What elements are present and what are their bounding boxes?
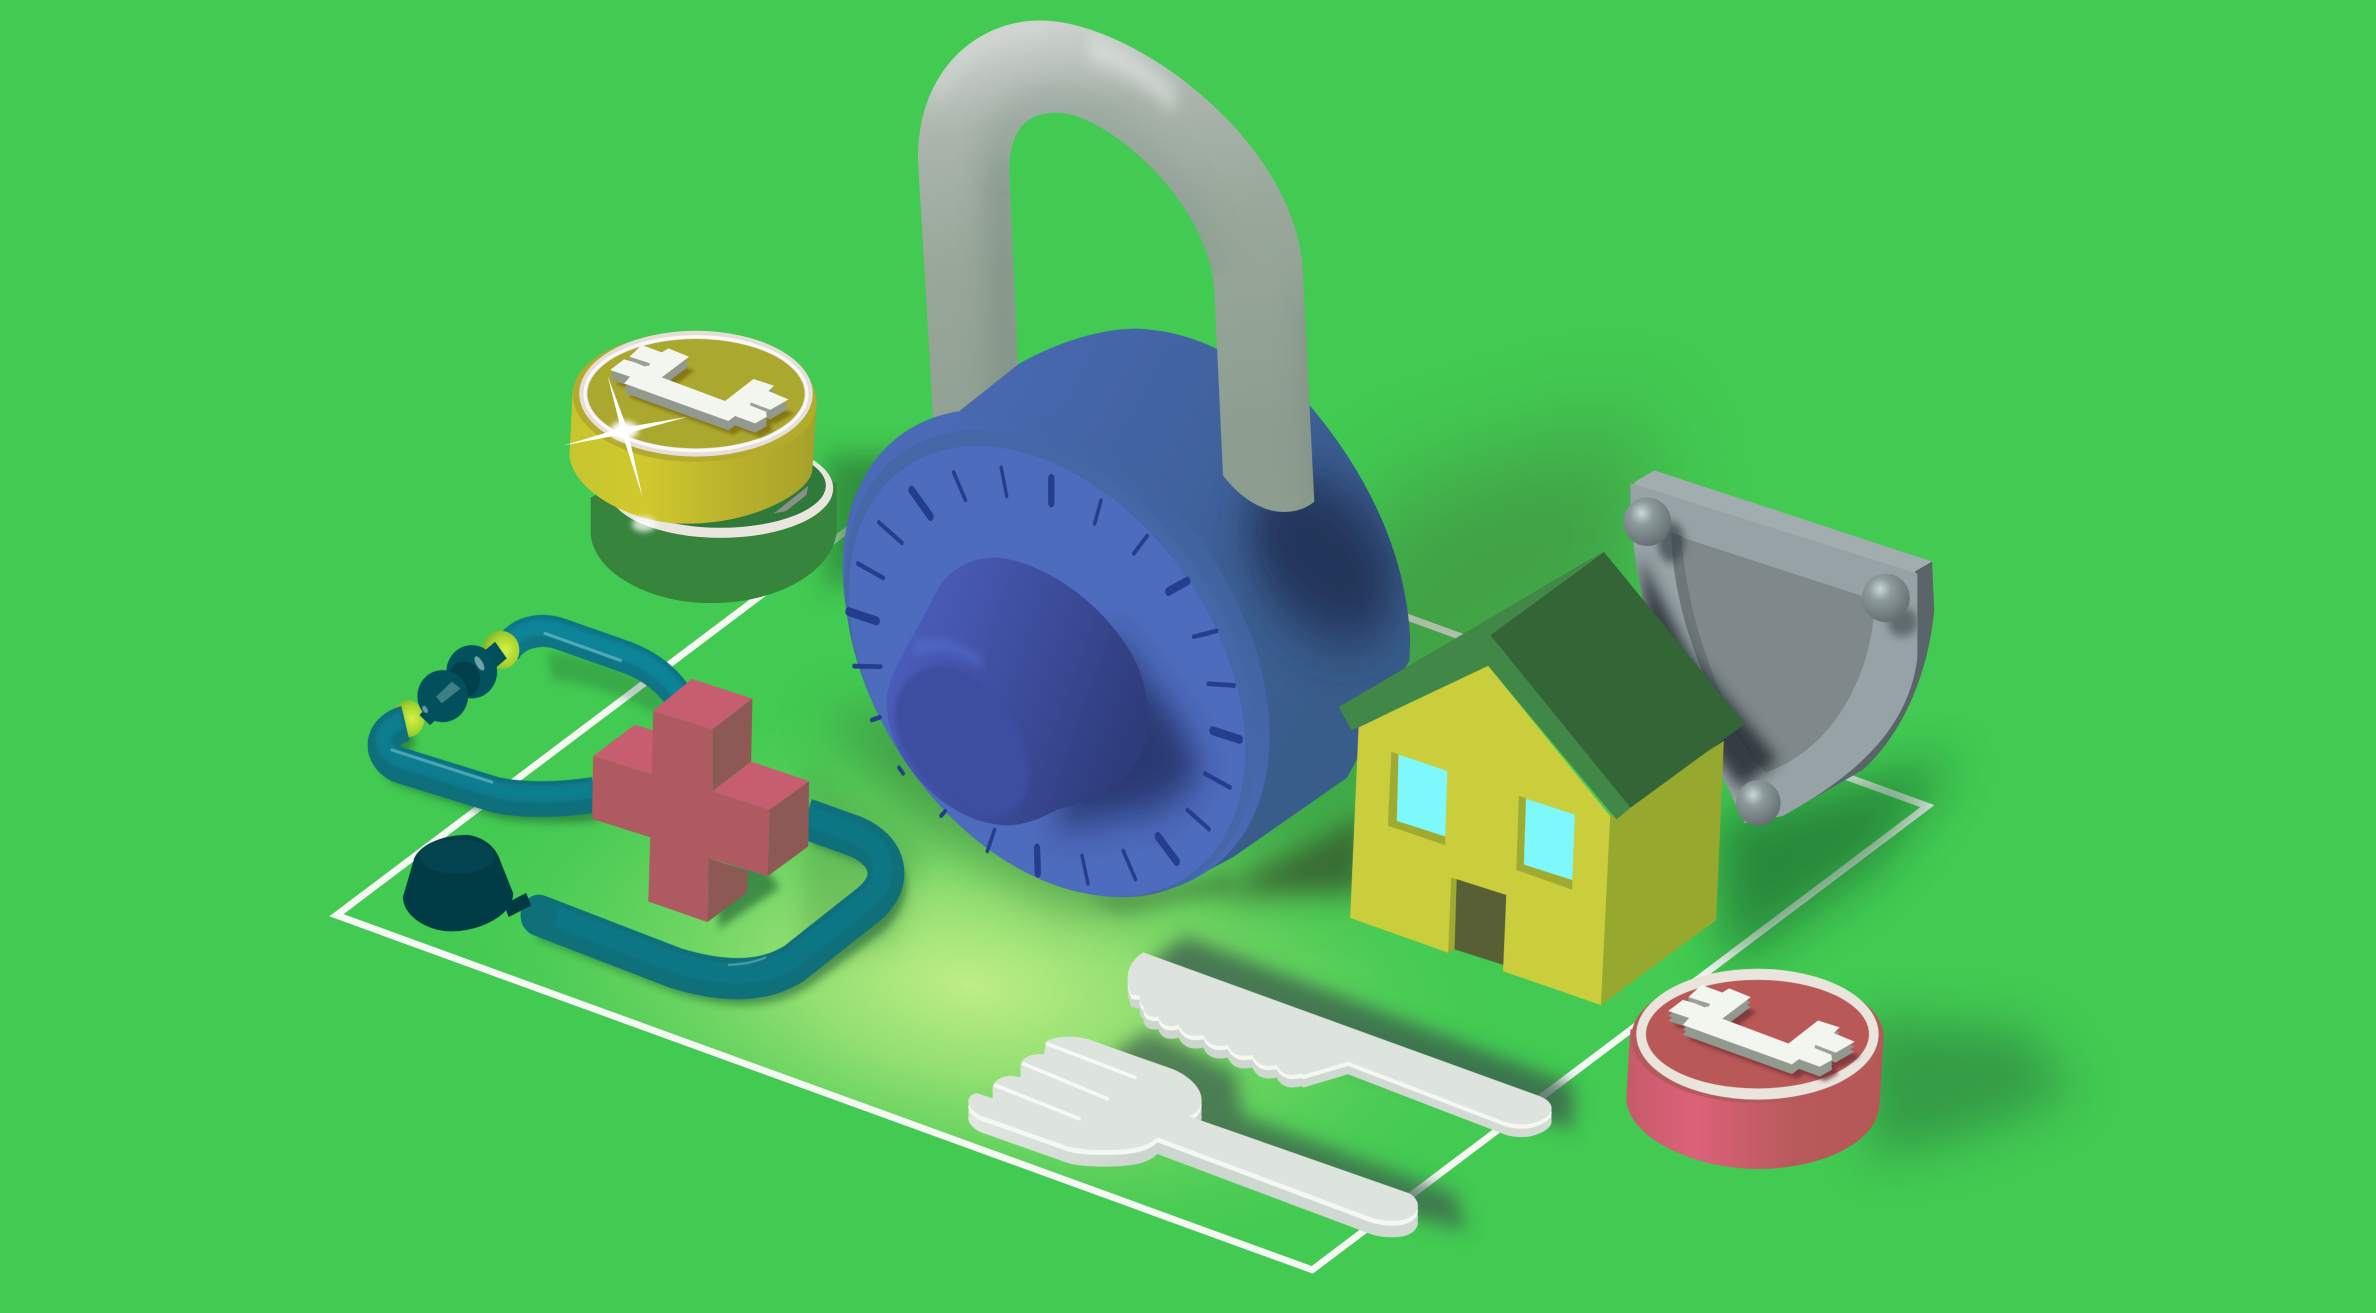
ear connector — [419, 642, 507, 725]
dial ticks — [848, 468, 1240, 883]
fork top face — [968, 1037, 1418, 1221]
coin stack: green coin with yellow coin on top — [564, 331, 837, 603]
yellow coin — [569, 331, 816, 524]
stethoscope — [383, 628, 894, 991]
floor glow — [524, 751, 1413, 1212]
shield inner panel — [1682, 537, 1875, 772]
right window — [1516, 796, 1575, 890]
shackle — [918, 20, 1310, 418]
shield shadows — [1640, 522, 1918, 789]
knife top face — [1128, 952, 1552, 1124]
yen symbol — [1668, 985, 1855, 1067]
illustration: isometric scene with padlock and basic needs — [330, 20, 2079, 1274]
lower ear tip — [392, 700, 425, 737]
chest piece — [403, 835, 529, 931]
floor outline — [336, 452, 1927, 1270]
upper ear tip — [482, 631, 519, 669]
knob shadow — [1053, 634, 1204, 827]
tubes — [383, 628, 886, 979]
green coin — [591, 438, 837, 603]
shield — [1623, 470, 1934, 826]
shield top edge — [1631, 470, 1932, 575]
house front wall — [1350, 666, 1610, 1005]
shield rivets — [1623, 498, 1910, 826]
house — [1339, 552, 1745, 1005]
house right wall — [1601, 741, 1724, 1005]
medical cross — [592, 679, 809, 929]
sparkle — [564, 376, 688, 532]
lock face groove — [760, 353, 1341, 975]
lock face rim — [754, 329, 1358, 974]
roof — [1339, 552, 1745, 819]
dial knob — [886, 558, 1148, 825]
lock body — [959, 328, 1410, 886]
door — [1448, 878, 1506, 965]
beads — [417, 645, 497, 722]
yen symbol — [610, 345, 788, 423]
padlock — [754, 21, 1417, 975]
shackle right leg — [1214, 260, 1314, 512]
cutlery shadows — [1106, 936, 1573, 1230]
ground shadows — [803, 417, 2076, 1159]
shield front — [1630, 483, 1917, 823]
knife — [1128, 952, 1552, 1137]
tube shadow — [390, 667, 894, 991]
red coin — [1626, 969, 1884, 1169]
dial face — [767, 371, 1327, 971]
lower tube — [539, 819, 886, 979]
shield side — [1783, 562, 1934, 816]
left window — [1388, 752, 1447, 845]
fork — [968, 1037, 1418, 1237]
